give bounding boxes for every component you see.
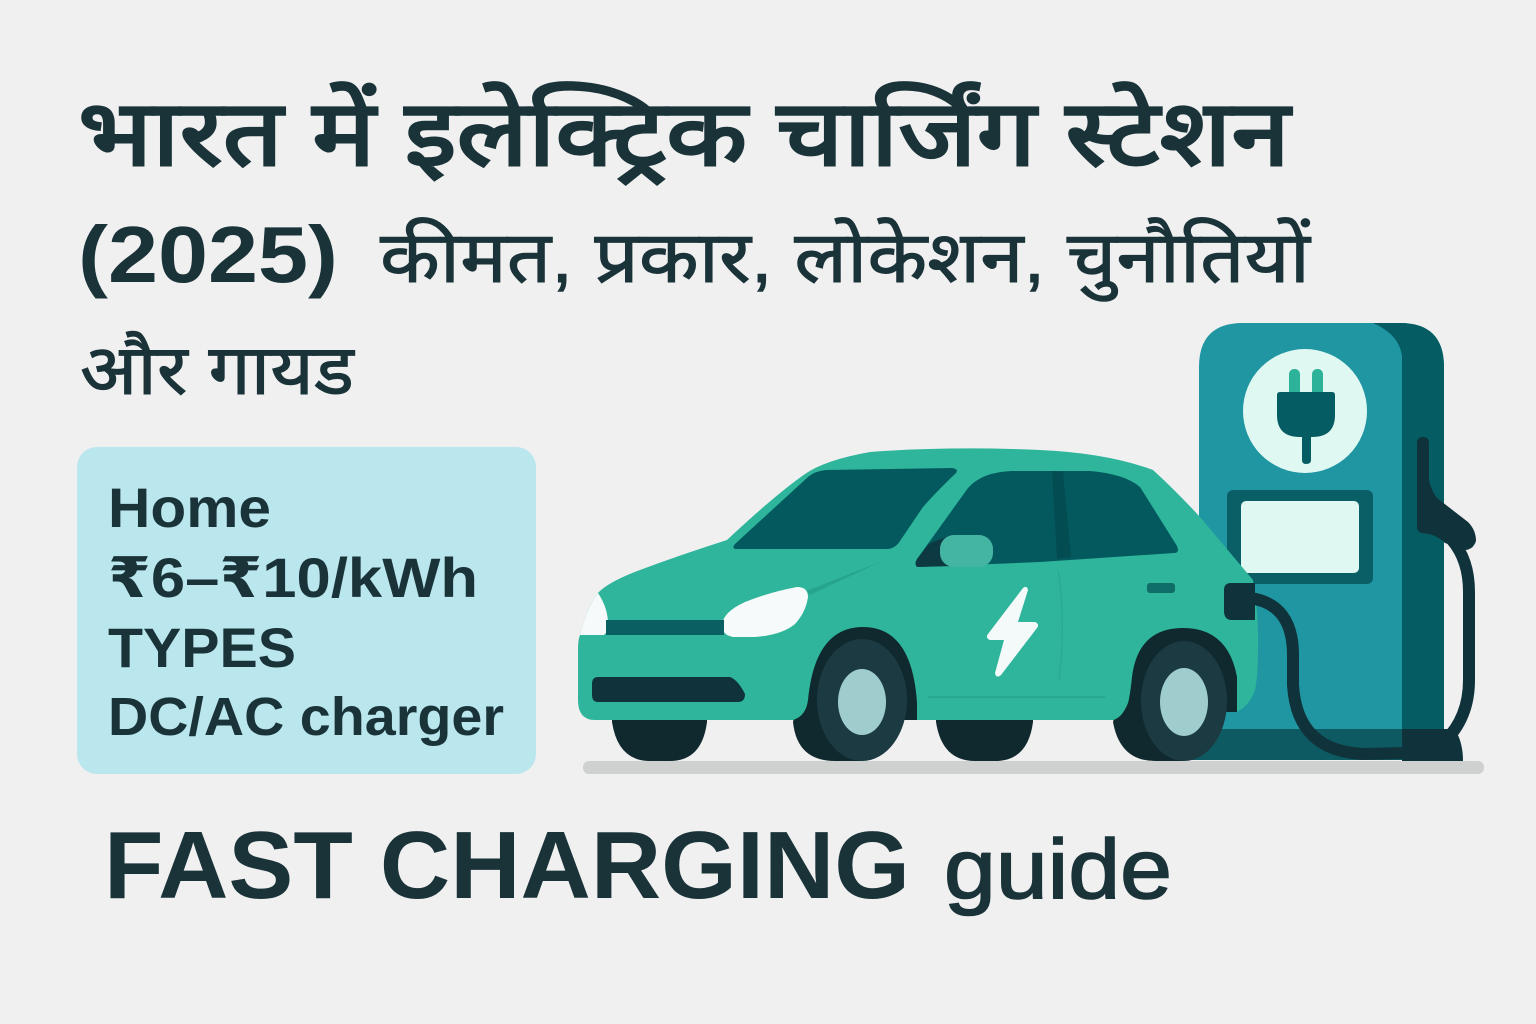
panel text: charger types: DC/AC charger	[108, 687, 504, 747]
icon: charging station	[1190, 323, 1476, 761]
grille strip	[606, 620, 724, 635]
rear wheel	[1141, 641, 1227, 761]
panel text: price: ₹6–₹10/kWh	[108, 546, 478, 609]
icon: lightning bolt	[987, 587, 1038, 677]
car body	[578, 448, 1258, 720]
window divider	[1052, 471, 1071, 559]
windscreen	[733, 468, 957, 549]
panel text: types: TYPES	[108, 616, 296, 679]
station base	[1190, 729, 1402, 760]
title line 3: और गायड	[80, 331, 356, 409]
panel text: home: Home	[108, 476, 271, 539]
charging cable	[1250, 598, 1402, 754]
station display	[1227, 490, 1373, 584]
wing mirror	[940, 535, 993, 567]
nozzle holder	[1417, 437, 1476, 550]
title line 2: year: (2025)	[78, 210, 338, 299]
lower intake	[592, 677, 745, 702]
icon: electric car	[578, 448, 1258, 761]
dark shadow behind mirror	[916, 537, 955, 567]
headlight	[722, 587, 808, 637]
car plug	[1224, 583, 1255, 620]
title line 1: भारत में इलेक्ट्रिक चार्जिंग स्टेशन	[78, 81, 1293, 187]
side marker light	[580, 593, 608, 635]
bottom heading: guide: guide	[944, 822, 1172, 916]
holster cable	[1444, 540, 1469, 742]
icon: plug badge	[1243, 349, 1367, 473]
title line 2: subtitle: कीमत, प्रकार, लोकेशन, चुनौतियों	[380, 217, 1311, 302]
ground shadow	[583, 761, 1484, 774]
body crease lines	[806, 562, 880, 595]
front wheel	[817, 639, 907, 761]
rear wheel well and outer tyre	[1113, 624, 1237, 761]
far-side tyres	[612, 715, 707, 761]
bottom heading: FAST CHARGING	[104, 812, 910, 919]
side windows	[916, 471, 1178, 567]
front wheel well and outer tyre	[793, 622, 917, 761]
door handle	[1147, 583, 1175, 593]
panel: cost and types	[77, 447, 536, 774]
